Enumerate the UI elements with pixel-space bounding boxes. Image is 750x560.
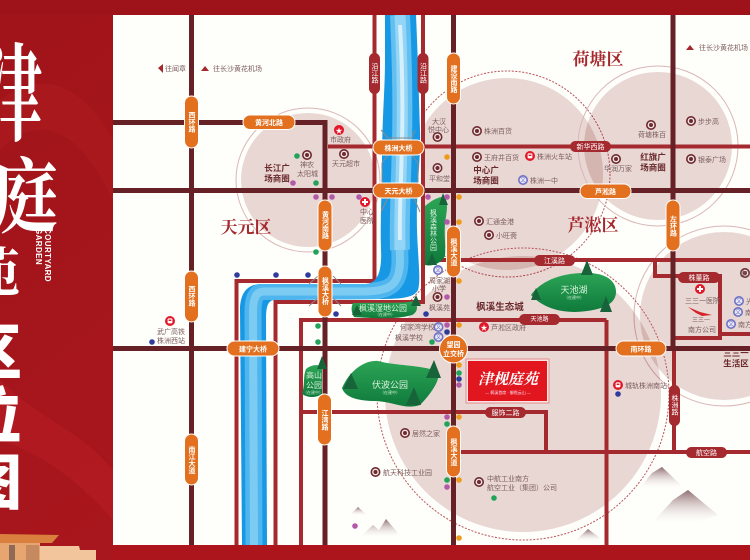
pill: Yanjiang Road west: 沿江路 [371,62,378,85]
POI: South company: 三三一 [692,317,710,324]
park: Fengxi wetland park: （在建中） [375,311,395,317]
POI: Hejiazhou primary school: 周家湖 [429,276,450,285]
POI: China Resources Vanguard: 华润万家 [604,164,632,173]
zone: 331: 三三一 [723,348,749,358]
pill: Yanjiang Road east: 沿江路 [420,62,427,85]
pill: Jiangxi Road [534,255,575,266]
pill: Jiangwan Road: 江湾路 [321,410,328,432]
park: Fengxi wetland park [352,295,421,318]
POI: Hetang Zhubai [638,120,666,139]
pill: Hangkong Road: 航空路 [696,448,717,457]
pill: Jianning Bridge: 建宁大桥 [239,344,267,354]
park: Tianchi lake: 天池湖 [560,284,588,295]
pill: Yanjiang Road east [418,53,428,94]
circle: 331 living area [634,226,750,406]
pill: Zhuzhou Bridge: 株洲大桥 [384,144,412,152]
transit dots [149,153,621,541]
business zone labels [264,152,749,368]
POI: Shennong sun city: 神农 [300,160,314,169]
circle: Changjiang Plaza [236,108,380,252]
pill: Jianshe South [446,53,460,104]
pill: Huanghe South: 黄河南路 [322,210,329,240]
district: Tianyuan: 天元区 [220,218,272,237]
park: Gaoshan park: 公园 [306,381,322,390]
district names [220,49,624,237]
POI: Dahan: 大汉 [432,117,446,126]
POI: 331 hospital: 三三一医院 [685,296,720,305]
POI: Wuguang high-speed rail: 株洲西站 [157,336,185,345]
POI: Huitong Jingang: 汇通金港 [486,217,514,226]
POI: city government: 市政府 [330,135,351,144]
pill: Lusong Road [580,184,631,198]
POI: Lusong district government [479,322,526,332]
zone: Hongqi: 红旗广 [640,152,666,162]
pill: Huanghe North: 黄河北路 [255,118,283,127]
direction: to Changsha airport: 往长沙黄花机场 [213,64,262,73]
pill: Nanjiang Avenue [184,434,198,485]
pill: Huanghe North [243,115,295,130]
pill: West Ring lower [184,271,198,322]
park: Tianchi lake: （在建中） [564,294,584,300]
pill: Hangkong Road [686,447,727,458]
pill: Fushi 2nd Road: 服饰二路 [492,408,520,417]
POI: Dahan: 悦中心 [428,125,449,134]
direction: to Liling: 往闻章 [165,64,186,73]
POI: Yintai Plaza: 银泰广场 [698,155,726,164]
POI: Fengxi school [395,332,444,342]
POI: China Resources Vanguard [604,154,632,173]
POI: Xiaowang [484,230,517,240]
pill: Jianshe South: 建设南路 [450,64,458,94]
zone: Fengxi eco city: 枫溪生态城 [476,301,524,313]
POI: Aerospace technology park: 航天科技工业园 [383,468,432,477]
road pills dark red [369,53,727,458]
POI: Wuguang high-speed rail [157,316,185,345]
POI: AVIC South: 航空工业（集团）公司 [487,483,557,492]
zone: Central: 场商圈 [473,176,499,186]
POI: Easyhome [400,428,440,438]
POI: railway station [525,151,572,161]
direction: to Liling [158,64,186,73]
POI: Fengxi school: 枫溪学校 [395,333,423,342]
POI: Wuguang high-speed rail: 武广高铁 [157,327,185,336]
POI: Hejiazhou primary school: 小学 [432,284,446,293]
pill: Jianning Bridge [227,341,279,356]
zone: Hongqi: 场商圈 [640,162,666,172]
interchange: Wangyuan: 立交桥 [443,349,464,358]
POI: Shennong sun city: 太阳城 [297,169,318,178]
points of interest [157,43,750,492]
POI: Bubugao: 步步高 [698,117,719,126]
pill: Nanhuan Road: 南环路 [630,344,652,354]
park: Fubo park [342,360,441,407]
POI: Zhuzhou department store: 株洲百货 [484,126,512,136]
POI: central hospital [360,197,374,225]
POI: central hospital: 中心 [360,207,374,216]
direction: to Changsha airport right: 往长沙黄花机场 [699,43,748,52]
pill: Huanghe South [318,200,332,251]
zone: Changjiang: 场商圈 [264,174,290,184]
pill: West Ring lower: 西环路 [188,286,196,308]
POI: Bubugao [686,116,719,126]
park: Fengxi forest park [425,193,448,265]
pill: Zhuzhou Bridge [373,140,424,155]
POI: Xiaowang: 小旺斋 [496,231,517,240]
circle: Hongqi Plaza [578,66,738,226]
direction: to Changsha airport right [686,43,748,52]
POI: central hospital: 医院 [360,216,374,225]
POI: Shennong sun city [297,150,318,178]
POI: Fengxi garden [429,292,450,312]
POI: Zhuzhou department store [472,126,512,136]
pill: Tianchi Road [519,314,560,325]
POI: Tianyuan supermarket: 天元超市 [332,159,360,168]
POI: Wangfujing: 王府井百货 [484,153,519,162]
pill: Zhudong Road: 株董路 [688,273,710,282]
pill: Fengxi Avenue lower [446,426,460,477]
pill: Zhuzhou Road [669,385,680,426]
pill: Fushi 2nd Road [485,407,526,418]
project logo: — 枫溪首席 · 御揽云山 — [485,389,531,395]
POI: Dahan [428,117,449,142]
English subtitle: GARDEN [34,228,43,265]
circle: Central Plaza [404,71,610,277]
pill: Zuohuan Road: 左环路 [670,215,677,238]
pill: Nanjiang Avenue: 南江大道 [188,445,196,475]
pill: Tianyuan Bridge [373,183,424,198]
parks [302,193,616,407]
pill: West Ring [184,96,198,148]
POI: Hejiazhou primary school [429,265,450,293]
pill: Jiangwan Road [318,394,332,445]
direction: to Changsha airport [201,64,262,73]
park: Gaoshan park: 高山 [306,370,322,380]
POI: Pinghe: 平和堂 [429,174,450,183]
POI: city government [330,125,351,144]
district circles [236,66,750,540]
project logo [466,359,549,403]
river [230,15,430,545]
pill: Lusong Road: 芦淞路 [595,187,616,196]
pill: Fengxi Avenue upper: 枫溪大道 [450,237,458,267]
pill: Nanhuan Road [616,341,666,356]
project logo: 津枧庭苑 [478,371,541,388]
pill: Fengxi Bridge [318,266,332,317]
park: Fubo park: （在建中） [380,389,400,395]
POI: Huitong Jingang [474,216,514,226]
bridge ticks [309,130,420,306]
pill: Tianchi Road: 天池路 [530,315,549,323]
POI: Wangfujing [472,152,519,162]
road pills orange [184,53,680,485]
POI: South company: 南方公司 [688,325,716,334]
zone: 331: 生活区 [723,358,749,368]
pill: Tianyuan Bridge: 天元大桥 [384,186,412,196]
park: Fubo park: 伏波公园 [372,379,408,390]
park: Fengxi wetland park: 枫溪湿地公园 [359,303,407,313]
English subtitle: COURTYARD [43,228,52,282]
pill: Fengxi Bridge: 枫溪大桥 [322,276,329,306]
POI: Fengxi garden: 枫溪苑 [429,303,450,312]
park: Fengxi forest park: 枫溪森林公园 [430,208,437,252]
park: Gaoshan park [302,356,327,397]
pill: Xinhua West: 新华西路 [576,142,604,151]
POI: Pinghe [429,163,450,183]
pill: Zhuzhou Road: 株洲路 [671,394,678,417]
pill: Fengxi Avenue lower: 枫溪大道 [450,437,458,467]
POI: intercity Zhuzhou South: 城轨株洲南站 [625,381,667,390]
POI: Aerospace technology park [370,467,432,477]
POI: 331 hospital [685,284,720,305]
pill: Yanjiang Road west [369,53,380,94]
mountains [350,467,718,541]
district: Hetang: 荷塘区 [572,49,624,69]
district: Lusong: 芦淞区 [568,215,618,235]
POI: AVIC South [474,474,557,492]
POI: AVIC South: 中航工业南方 [487,474,529,483]
illustration: building [0,534,96,560]
POI: Yintai Plaza [686,154,726,164]
title: project name and location map [0,38,58,517]
POI: Hejiawan school: 何家湾学校 [400,322,435,332]
pill: Zuohuan Road [666,200,680,251]
POI: No.1 Middle School [518,175,558,185]
POI: South company [688,307,716,334]
POI: school right 3 [726,319,750,329]
POI: Hejiawan school [400,322,444,332]
POI: Easyhome: 居然之家 [412,429,440,438]
interchange: Wangyuan [440,335,468,363]
park: Gaoshan park: （在建中） [303,389,323,395]
pill: Xinhua West [570,141,611,152]
POI: railway station: 株洲火车站 [537,152,572,161]
circle: Fengxi eco city [377,248,669,540]
POI: school right 2 [733,307,750,317]
red roads [236,15,750,545]
pill: West Ring: 西环路 [188,112,196,134]
zone: Changjiang: 长江广 [264,163,290,173]
POI: intercity Zhuzhou South [613,380,667,390]
pill: Fengxi Avenue upper [446,226,460,277]
zone: Central: 中心广 [473,165,499,175]
interchange: Wangyuan: 望园 [446,340,460,349]
POI: Hetang Zhubai: 荷塘株百 [638,130,666,139]
pill: Jiangxi Road: 江溪路 [544,256,565,265]
POI: school right [734,296,750,306]
POI: Tianyuan supermarket [332,149,360,168]
park: Tianchi lake [531,260,616,312]
pill: Zhudong Road [678,272,720,283]
POI: Lusong district government: 芦淞区政府 [491,323,526,332]
POI: No.1 Middle School: 株洲一中 [530,176,558,185]
